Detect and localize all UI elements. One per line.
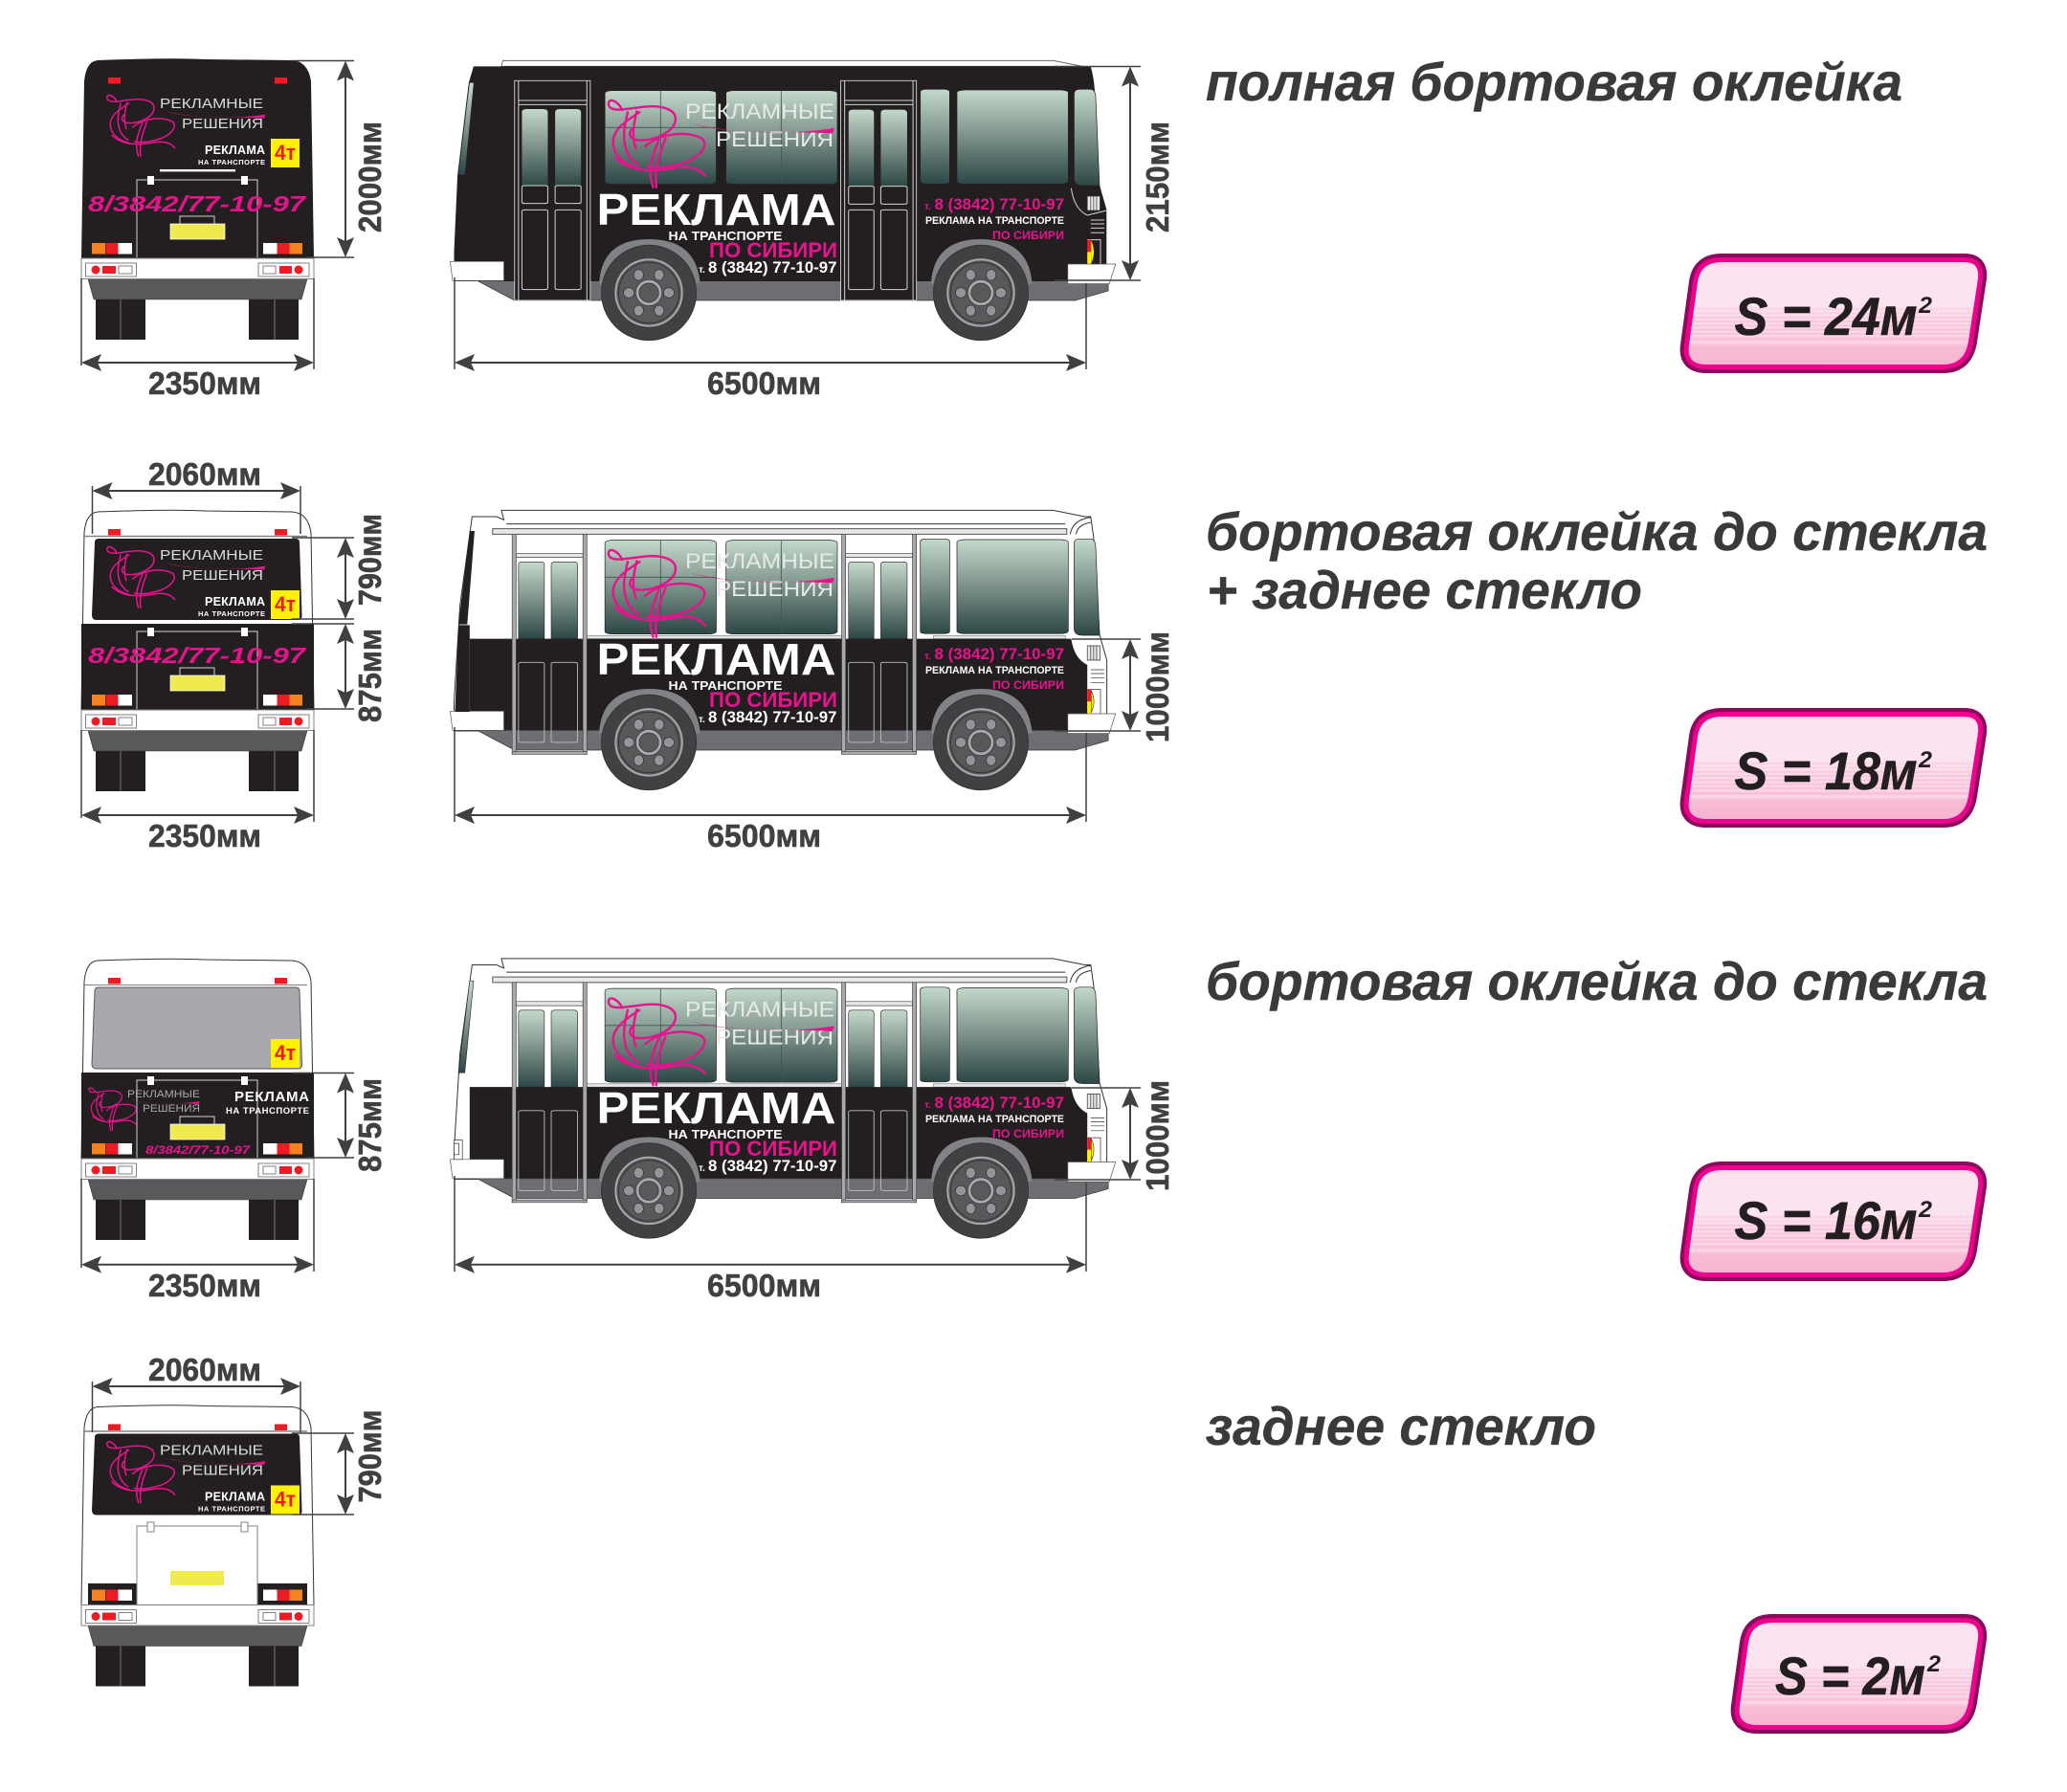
small rear logo bbox=[89, 1088, 200, 1130]
side ad text: 8 (3842) 77-10-97 bbox=[934, 646, 1064, 663]
rear door and plate bbox=[137, 176, 257, 257]
dimension 2350мм: 2350мм bbox=[148, 365, 261, 401]
area badge: 18 m2: S = 18м bbox=[1734, 741, 1918, 801]
dimension 2000мм bbox=[292, 61, 388, 257]
rear body white bbox=[81, 510, 314, 710]
area badge: 24 m2: S = 24м bbox=[1734, 286, 1918, 346]
row 2: side view bbox=[450, 510, 1175, 853]
side bus drawing bbox=[450, 959, 1116, 1238]
dimension 2350мм: 2350мм bbox=[148, 1268, 261, 1303]
heading: row 2: бортовая оклейка до стекла bbox=[1206, 501, 1988, 562]
rear door and plate bbox=[137, 1076, 257, 1158]
rear phone: 8/3842/77-10-97 bbox=[88, 191, 307, 216]
side logo bbox=[609, 997, 834, 1085]
dimension 6500мм: 6500мм bbox=[707, 1268, 821, 1303]
dimension 1000мм bbox=[1055, 631, 1175, 742]
rear logo bbox=[107, 95, 265, 156]
area badge: 2 m2: S = 2м bbox=[1775, 1646, 1925, 1706]
4т sign: 4т bbox=[275, 1487, 296, 1512]
side ad text: т. bbox=[924, 652, 931, 662]
dimension 2060мм bbox=[92, 1352, 300, 1432]
rear logo: РЕКЛАМНЫЕ bbox=[160, 96, 263, 112]
rear body white bbox=[81, 959, 314, 1159]
dimension 2150мм: 2150мм bbox=[1140, 122, 1175, 232]
side ad text: т. bbox=[924, 1100, 931, 1111]
side ad text: ПО СИБИРИ bbox=[709, 1137, 837, 1161]
rear logo: РЕШЕНИЯ bbox=[182, 116, 263, 132]
row 3: rear view, wrap below glass bbox=[81, 959, 314, 1240]
rear door white with plate bbox=[88, 1522, 307, 1604]
area badge: 24 m2: 2 bbox=[1918, 293, 1933, 319]
side ad text: 8 (3842) 77-10-97 bbox=[934, 196, 1064, 213]
side ad text: т. bbox=[699, 715, 705, 725]
rear marker lights bbox=[108, 77, 287, 84]
dimension 2350мм bbox=[81, 1179, 314, 1303]
rear ad text: НА ТРАНСПОРТЕ bbox=[198, 1504, 265, 1514]
heading: row 1: полная бортовая оклейка bbox=[1206, 52, 1902, 112]
area badge: 2 m2: 2 bbox=[1926, 1651, 1942, 1677]
area badge: 24 m2 bbox=[1689, 262, 1978, 365]
rear bumper and tires bbox=[81, 1159, 314, 1240]
side ad text: РЕКЛАМА bbox=[597, 634, 836, 684]
side logo: РЕШЕНИЯ bbox=[716, 127, 833, 151]
side ad text: НА ТРАНСПОРТЕ bbox=[668, 230, 783, 243]
side logo: РЕКЛАМНЫЕ bbox=[685, 100, 834, 123]
side ad text: 8 (3842) 77-10-97 bbox=[708, 1158, 836, 1175]
rear ad text: РЕКЛАМА bbox=[205, 1491, 265, 1504]
dimension 2150мм bbox=[1055, 67, 1175, 280]
row 2: rear view, wrap below glass plus rear window bbox=[81, 510, 314, 791]
dimension 6500мм bbox=[455, 1176, 1086, 1303]
dimension 1000мм bbox=[1055, 1080, 1175, 1191]
rear marker lights bbox=[108, 978, 287, 984]
area badge: 18 m2 bbox=[1689, 717, 1978, 819]
rear ad text: НА ТРАНСПОРТЕ bbox=[226, 1106, 309, 1117]
dimension 2060мм: 2060мм bbox=[148, 456, 261, 492]
rear logo bbox=[107, 546, 265, 608]
side ad text: т. bbox=[924, 202, 931, 212]
dimension 6500мм bbox=[455, 277, 1086, 401]
rear window with ad bbox=[92, 539, 302, 620]
rear logo bbox=[107, 1442, 265, 1502]
side bus drawing bbox=[450, 60, 1116, 341]
area badge: 18 m2: 2 bbox=[1918, 747, 1933, 773]
dimension 2350мм bbox=[81, 278, 314, 401]
side ad text: ПО СИБИРИ bbox=[992, 680, 1064, 692]
side logo: РЕКЛАМНЫЕ bbox=[685, 549, 834, 573]
side ad text: РЕКЛАМА bbox=[597, 185, 836, 234]
heading: row 2 bbox=[1206, 501, 1988, 620]
area badge: 16 m2 bbox=[1689, 1170, 1978, 1272]
lower black panel bbox=[81, 1073, 314, 1159]
rear phone: 8/3842/77-10-97 bbox=[88, 643, 307, 668]
rear logo: РЕШЕНИЯ bbox=[182, 1462, 263, 1479]
side ad text: РЕКЛАМА bbox=[597, 1083, 836, 1133]
side logo: РЕШЕНИЯ bbox=[716, 1026, 833, 1049]
rear bumper and tires bbox=[81, 1605, 314, 1686]
rear ad text: НА ТРАНСПОРТЕ bbox=[198, 158, 265, 166]
rear ad text bbox=[198, 144, 265, 166]
rear logo: РЕШЕНИЯ bbox=[182, 567, 263, 584]
rear lights bbox=[92, 243, 302, 254]
side logo bbox=[609, 100, 834, 188]
dimension 2060мм bbox=[92, 456, 300, 534]
rear body white bbox=[81, 1405, 314, 1605]
rear lights bbox=[92, 1143, 302, 1154]
area badge: 16 m2: 2 bbox=[1918, 1197, 1933, 1223]
side ad text: 8 (3842) 77-10-97 bbox=[708, 709, 836, 726]
side ad text: 8 (3842) 77-10-97 bbox=[708, 259, 836, 277]
4т sign: 4т bbox=[275, 141, 296, 165]
row 4: rear view, rear window only bbox=[81, 1405, 314, 1686]
row 1: rear view, full wrap bbox=[81, 58, 388, 401]
side ad text: РЕКЛАМА НА ТРАНСПОРТЕ bbox=[925, 665, 1064, 676]
side ad text: РЕКЛАМА НА ТРАНСПОРТЕ bbox=[925, 1114, 1064, 1125]
heading: row 2: + заднее стекло bbox=[1207, 560, 1642, 620]
dimension 1000мм: 1000мм bbox=[1140, 631, 1175, 742]
row 1: side view, full wrap bbox=[450, 60, 1175, 401]
side ad text: 8 (3842) 77-10-97 bbox=[934, 1095, 1064, 1112]
dimension 875мм: 875мм bbox=[352, 1078, 388, 1172]
side logo: РЕШЕНИЯ bbox=[716, 577, 833, 601]
rear logo: РЕКЛАМНЫЕ bbox=[160, 1443, 263, 1458]
rear lights bbox=[92, 695, 302, 706]
side ad text bbox=[597, 1083, 1064, 1175]
rear ad text bbox=[226, 1089, 309, 1117]
side ad text: НА ТРАНСПОРТЕ bbox=[668, 679, 783, 693]
row 3: side view bbox=[450, 959, 1175, 1303]
4т sign bbox=[271, 139, 300, 167]
side ad text: ПО СИБИРИ bbox=[992, 231, 1064, 242]
side logo bbox=[609, 549, 834, 637]
dimension 2350мм bbox=[81, 730, 314, 853]
side ad text: НА ТРАНСПОРТЕ bbox=[668, 1128, 783, 1141]
rear ad text: РЕКЛАМА bbox=[234, 1089, 309, 1105]
rear ad text: НА ТРАНСПОРТЕ bbox=[198, 609, 265, 618]
rear marker lights bbox=[108, 1424, 287, 1430]
lower black panel bbox=[81, 624, 314, 710]
small rear logo: РЕКЛАМНЫЕ bbox=[127, 1089, 200, 1100]
area badge: 16 m2: S = 16м bbox=[1734, 1190, 1918, 1250]
rear ad text bbox=[198, 1491, 265, 1514]
rear logo: РЕКЛАМНЫЕ bbox=[160, 547, 263, 564]
dimension 2060мм: 2060мм bbox=[148, 1352, 261, 1387]
4т sign bbox=[271, 1039, 300, 1068]
heading: row 3: бортовая оклейка до стекла bbox=[1206, 951, 1988, 1011]
side ad text bbox=[597, 634, 1064, 726]
rear window grey bbox=[92, 987, 302, 1069]
side ad text: ПО СИБИРИ bbox=[709, 688, 837, 712]
side logo: РЕКЛАМНЫЕ bbox=[685, 997, 834, 1022]
dimension 1000мм: 1000мм bbox=[1140, 1080, 1175, 1191]
side ad text: т. bbox=[699, 265, 705, 276]
4т sign bbox=[271, 1485, 300, 1514]
side ad text bbox=[597, 185, 1064, 277]
rear window with ad bbox=[92, 1433, 302, 1515]
rear body black bbox=[81, 58, 314, 258]
dimension 6500мм bbox=[455, 727, 1086, 853]
dimension 790мм: 790мм bbox=[352, 514, 388, 606]
dimension 2350мм: 2350мм bbox=[148, 818, 261, 853]
side ad text: ПО СИБИРИ bbox=[992, 1129, 1064, 1140]
side ad text: т. bbox=[699, 1163, 705, 1174]
area badge: 2 m2 bbox=[1740, 1623, 1978, 1725]
4т sign bbox=[271, 590, 300, 619]
4т sign: 4т bbox=[275, 592, 296, 616]
dimension 875мм bbox=[292, 624, 388, 722]
dimension 790мм bbox=[292, 514, 388, 619]
heading: row 4: заднее стекло bbox=[1206, 1396, 1596, 1456]
rear door and plate bbox=[137, 628, 257, 709]
rear ad text: РЕКЛАМА bbox=[205, 595, 265, 608]
dimension 875мм: 875мм bbox=[352, 629, 388, 722]
rear phone: 8/3842/77-10-97 bbox=[145, 1145, 251, 1157]
side ad text: РЕКЛАМА НА ТРАНСПОРТЕ bbox=[925, 215, 1064, 227]
dimension 790мм bbox=[292, 1410, 388, 1515]
dimension 790мм: 790мм bbox=[352, 1410, 388, 1502]
dimension 2000мм: 2000мм bbox=[352, 122, 388, 232]
small rear logo: РЕШЕНИЯ bbox=[143, 1103, 200, 1115]
rear ad text bbox=[198, 595, 265, 618]
rear marker lights bbox=[108, 529, 287, 536]
4т sign: 4т bbox=[275, 1041, 296, 1065]
dimension 6500мм: 6500мм bbox=[707, 365, 821, 401]
dimension 6500мм: 6500мм bbox=[707, 818, 821, 853]
dimension 875мм bbox=[292, 1073, 388, 1172]
side ad text: ПО СИБИРИ bbox=[709, 238, 837, 262]
rear lights bbox=[92, 1590, 302, 1601]
rear bumper and tires bbox=[81, 258, 314, 340]
rear bumper and tires bbox=[81, 710, 314, 791]
side bus drawing bbox=[450, 510, 1116, 790]
rear ad text: РЕКЛАМА bbox=[205, 144, 265, 157]
